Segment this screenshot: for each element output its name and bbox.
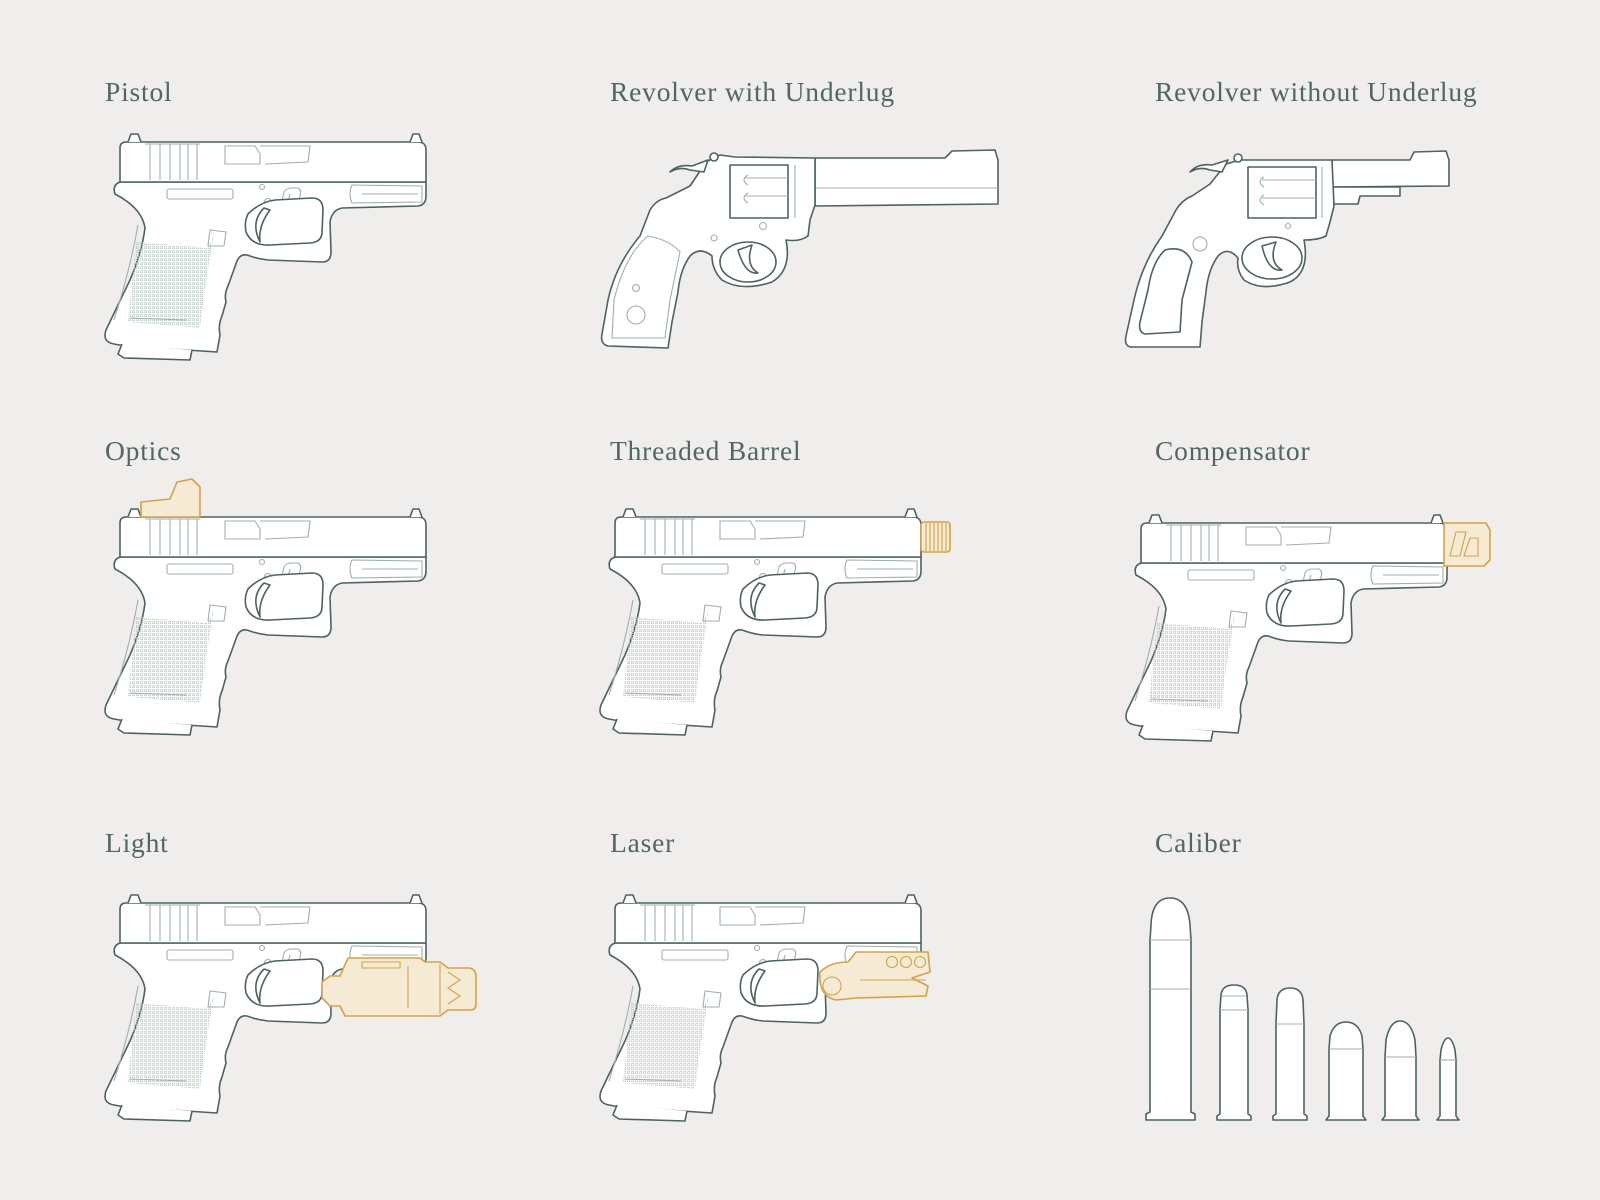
title: Optics: Optics: [105, 435, 182, 466]
revolver without underlug: [1126, 151, 1449, 347]
compensator pistol: [1126, 515, 1490, 741]
icon: weapon light: [322, 958, 476, 1016]
laser pistol: [600, 895, 930, 1121]
icon: threaded barrel: [921, 522, 950, 552]
title: Revolver with Underlug: Revolver with Underlug: [610, 76, 895, 107]
icon: compensator: [1444, 523, 1490, 566]
caliber: bullets: [1146, 898, 1459, 1120]
icon: laser: [820, 952, 930, 1000]
title: Pistol: Pistol: [105, 76, 172, 107]
title: Caliber: Caliber: [1155, 827, 1242, 858]
icon: red dot optic: [141, 479, 200, 517]
title: Compensator: Compensator: [1155, 435, 1310, 466]
pistol: basic: [105, 134, 426, 360]
title: Revolver without Underlug: Revolver without Underlug: [1155, 76, 1477, 107]
optics pistol: [105, 479, 426, 735]
light pistol: [105, 895, 476, 1121]
title: Light: Light: [105, 827, 169, 858]
title: Threaded Barrel: Threaded Barrel: [610, 435, 801, 466]
revolver with underlug: [602, 150, 998, 348]
threaded barrel pistol: [600, 509, 950, 735]
title: Laser: Laser: [610, 827, 675, 858]
